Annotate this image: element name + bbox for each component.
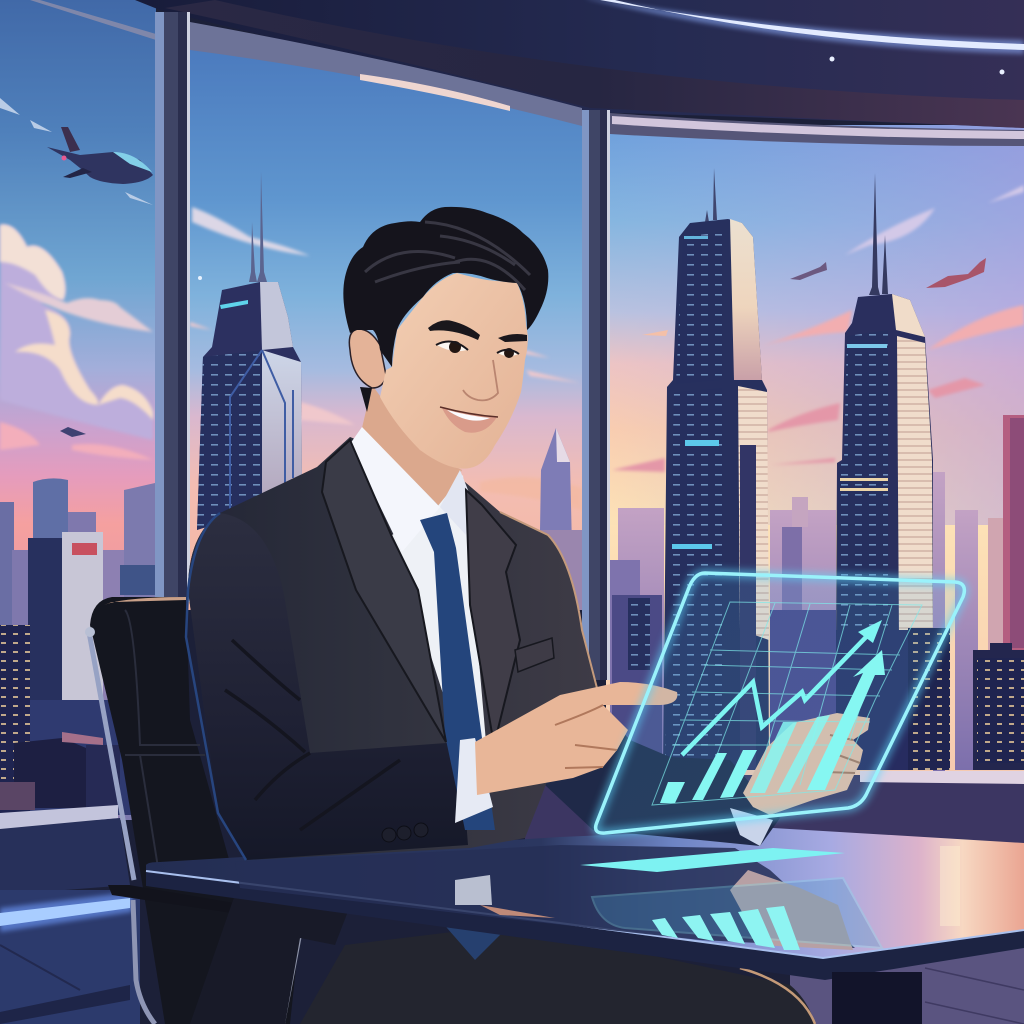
collar right [440, 470, 470, 535]
holding hand behind panel [730, 713, 870, 846]
jacket right rim light [500, 512, 598, 692]
window frame top band [30, 0, 1024, 146]
window mullion: centre column [582, 110, 610, 680]
floor [0, 890, 1024, 1024]
window mullion: left column [155, 12, 190, 602]
building: centre window tower [197, 172, 302, 530]
desk reflection of person [235, 845, 855, 950]
panel: left window sky [0, 0, 156, 820]
sleeve outline [186, 513, 246, 860]
big arrow [807, 650, 885, 790]
eyebrows [428, 320, 527, 342]
lapel left [322, 440, 446, 742]
chart grid [652, 602, 922, 805]
wall below right window [525, 771, 1024, 848]
icon: small flying craft left window [60, 427, 86, 437]
finger lines [555, 705, 617, 768]
chart bars [660, 715, 830, 803]
hair behind ear [360, 387, 372, 412]
nose [463, 360, 498, 400]
building: right window tall tower [663, 168, 769, 770]
glass desk [146, 828, 1024, 1024]
mouth [440, 407, 498, 433]
jacket hem below desk [190, 880, 360, 1024]
icon: flying craft right window, right [926, 258, 986, 288]
icon: flying craft right window, centre [790, 262, 827, 280]
building: centre window distant spire [515, 428, 582, 610]
face [380, 273, 528, 469]
rising trend line [682, 635, 868, 755]
building: right window second tower [836, 173, 933, 640]
collar left [350, 427, 440, 552]
jacket arm [188, 513, 468, 860]
hair [343, 207, 548, 367]
building: left window office block [0, 532, 155, 815]
wall below left window [0, 805, 130, 895]
pointing hand [475, 682, 677, 795]
neck [362, 385, 462, 507]
cuff [455, 738, 493, 823]
panel: right window sky [606, 125, 1024, 775]
hair highlights [365, 222, 530, 290]
jacket torso [188, 437, 598, 860]
ear [349, 329, 386, 388]
panel: centre window sky [188, 40, 584, 610]
icon: flying car upper left [47, 127, 153, 184]
office chair [85, 597, 307, 1024]
foreground city blocks: right window [612, 595, 1024, 770]
necktie [420, 513, 495, 830]
trend arrowhead upper [858, 620, 882, 643]
sleeve folds [225, 640, 400, 830]
pocket [515, 638, 554, 672]
jacket buttons [382, 823, 428, 842]
ceiling [135, 0, 1024, 128]
reflected light streak [580, 848, 845, 872]
far sleeve [545, 640, 780, 846]
eyes [436, 341, 519, 358]
person upper body [186, 207, 780, 860]
tie below desk [440, 920, 510, 960]
shirt [392, 475, 486, 742]
person lower body [190, 880, 815, 1024]
holographic chart panel [596, 573, 964, 833]
trousers [300, 925, 815, 1024]
distant skyline: left window [0, 478, 155, 820]
lapel right [466, 490, 520, 745]
reflected hologram [592, 878, 882, 950]
distant skyline: right window [610, 415, 1024, 772]
thigh rim light [740, 968, 815, 1024]
